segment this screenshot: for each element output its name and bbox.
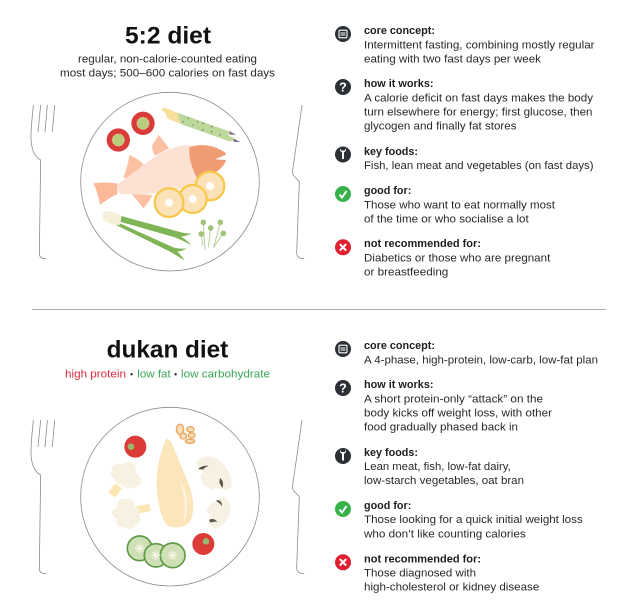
subtitle: dukan diet [65,369,270,381]
item: core concept: A 4-phase, high-protein, low-carb, low-fat plan [364,354,598,366]
item: core concept: eating with two fast days per week [364,53,541,65]
item: good for: good for: [364,500,411,512]
item: not recommended for: or breastfeeding [364,266,448,278]
fish [93,135,226,208]
item: good for [335,185,556,225]
item: how it works: ? [339,382,347,396]
subtitle: dukan diet: • [130,370,133,380]
item: good for: good for: [364,185,411,197]
item: how it works: how it works: [364,379,434,391]
item: core concept [335,25,595,65]
nuts [176,424,195,443]
info column: dukan diet [335,340,598,594]
item: how it works [335,78,593,133]
item: not recommended for: Diabetics or those who are pregnant [364,252,551,264]
item: core concept: core concept: [364,340,435,352]
cauliflower florets [108,462,151,529]
subtitle: dukan diet: low carbohydrate [181,369,270,381]
item: not recommended for: high-cholesterol or kidney disease [364,582,539,594]
tomato slices [107,112,155,152]
illustration: chicken plate with cutlery [31,407,304,586]
item: key foods [335,146,594,172]
subtitle: 5:2 diet: regular, non-calorie-counted eating [78,54,257,66]
item: key foods [335,447,524,487]
icon: fork [31,105,55,259]
item: not recommended for [335,238,551,278]
subtitle: 5:2 diet [60,54,275,80]
icon: fork [31,420,55,574]
item: key foods: Fish, lean meat and vegetables (on fast days) [364,160,594,172]
item: not recommended for: not recommended for: [364,238,481,250]
chicken breast [157,439,193,527]
item: core concept [335,340,598,366]
item: key foods: Lean meat, fish, low-fat dairy, [364,461,511,473]
icon: knife [292,105,304,259]
subtitle: 5:2 diet: most days; 500–600 calories on fast days [60,68,275,80]
spring onions [102,211,192,260]
item: key foods: key foods: [364,146,418,158]
plate [81,92,259,271]
title: dukan diet: dukan diet [107,337,228,364]
item: how it works: body kicks off weight loss, with other [364,408,552,420]
cucumber slices [127,536,185,568]
vegetable pod [162,107,240,142]
item: core concept: core concept: [364,25,435,37]
item: not recommended for: Those diagnosed with [364,568,476,580]
panel: dukan diet [31,337,598,594]
subtitle: dukan diet: low fat [137,369,172,381]
item: not recommended for: not recommended for: [364,553,481,565]
item: how it works [335,379,552,434]
item: key foods: key foods: [364,447,418,459]
subtitle: dukan diet: • [174,370,177,380]
item: how it works: ? [339,80,347,94]
plate [81,407,259,586]
item: how it works: food gradually phased back in [364,422,518,434]
item: good for: Those who want to eat normally most [364,199,556,211]
item: not recommended for [335,553,539,594]
info column: 5:2 diet [335,25,595,278]
lemon slices [155,172,224,217]
item: how it works: glycogen and finally fat stores [364,121,517,133]
item: how it works: A short protein-only “attack” on the [364,394,543,406]
item: good for: Those looking for a quick initial weight loss [364,514,583,526]
item: how it works: turn elsewhere for energy; first glucose, then [364,106,592,118]
item: good for [335,500,583,540]
panel: 5:2 diet [31,22,595,278]
item: good for: who don’t like counting calories [363,528,526,540]
herb sprigs [198,219,226,250]
subtitle: dukan diet: high protein [65,369,126,381]
item: good for: of the time or who socialise a lot [364,213,530,225]
illustration: fish plate with cutlery [31,92,304,271]
item: how it works: how it works: [364,78,434,90]
item: how it works: A calorie deficit on fast days makes the body [364,92,593,104]
item: key foods: low-starch vegetables, oat bran [364,475,524,487]
tomatoes [124,436,214,555]
icon: knife [292,420,304,574]
title: 5:2 diet: 5:2 diet [125,22,211,50]
item: core concept: Intermittent fasting, combining mostly regular [364,39,595,51]
mushrooms [196,456,232,528]
